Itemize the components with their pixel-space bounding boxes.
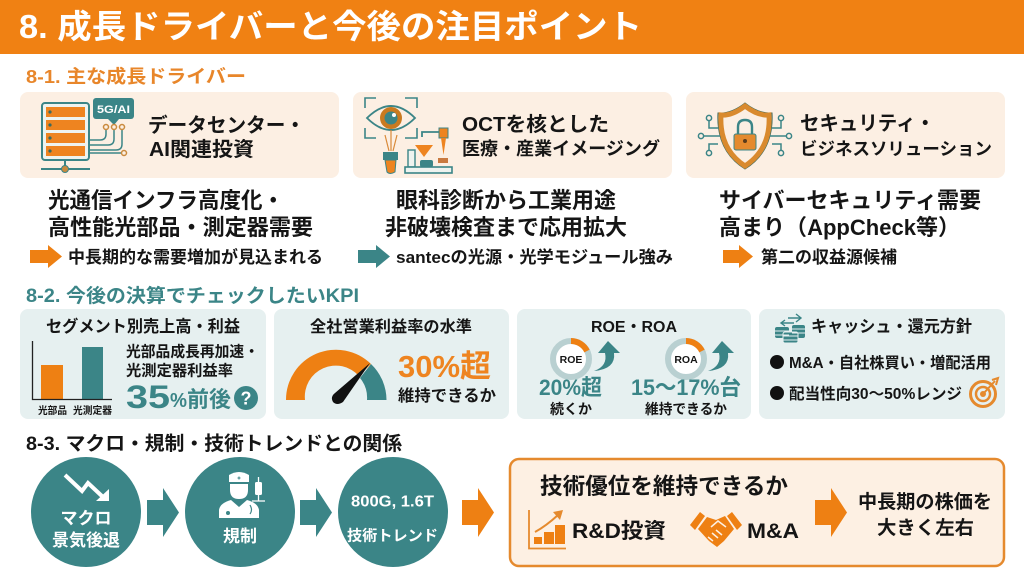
panel: operating margin KPI: 維持できるか	[398, 387, 496, 405]
arrow: orange to callout	[462, 488, 494, 537]
panel: operating margin KPI: 全社営業利益率の水準	[310, 317, 472, 336]
icon: target	[970, 378, 998, 406]
icon: shield with lock	[698, 103, 792, 169]
arrow: teal to regulation	[147, 488, 179, 537]
card title	[462, 113, 660, 159]
circle: macro: マクロ	[60, 509, 112, 528]
panel: segment KPI	[20, 309, 266, 419]
panel: operating margin KPI	[274, 309, 509, 419]
panel: technology leadership callout: 技術優位を維持できるか	[540, 474, 788, 499]
circle: technology trend: 技術トレンド	[347, 526, 438, 544]
donut: ROA	[668, 341, 704, 377]
panel: data center card	[20, 92, 339, 178]
icon: coins	[775, 314, 805, 343]
panel: segment KPI: 光部品成長再加速・	[126, 342, 259, 360]
circle: macro	[31, 457, 141, 567]
panel: segment KPI: 光測定器利益率	[126, 362, 233, 380]
text block: imaging applications: 非破壊検査まで応用拡大	[385, 215, 627, 240]
card title: セキュリティ・	[800, 113, 935, 135]
arrow: teal to technology	[300, 488, 332, 537]
icon: handshake	[690, 512, 742, 547]
arrow: orange 1	[30, 245, 62, 268]
donut: ROE	[553, 341, 589, 377]
text block: optical infrastructure	[48, 188, 313, 240]
panel: segment KPI: セグメント別売上高・利益	[46, 316, 240, 336]
icon: question	[234, 386, 258, 410]
panel: cash and returns KPI	[759, 309, 1005, 419]
card title: AI関連投資	[149, 137, 254, 161]
icon: server with 5G/AI	[41, 98, 134, 172]
bullet item: payout: 配当性向30〜50%レンジ	[789, 384, 962, 403]
text: result: 大きく左右	[877, 517, 974, 539]
donut: ROA: ROA	[674, 354, 698, 366]
panel: ROE ROA KPI: 続くか	[550, 401, 592, 417]
header banner: 8. 成長ドライバーと今後の注目ポイント	[19, 8, 642, 45]
text block: cyber security: サイバーセキュリティ需要	[719, 188, 981, 213]
header banner	[0, 0, 1024, 54]
metric: 35%: 35	[126, 379, 170, 415]
icon: falling trend	[65, 475, 109, 501]
donut: ROE: ROE	[560, 354, 582, 366]
note: revenue: 第二の収益源候補	[761, 247, 897, 267]
note: demand: 中長期的な需要増加が見込まれる	[68, 247, 323, 267]
gauge	[286, 350, 386, 404]
heading: 8-2: 8-2. 今後の決算でチェックしたいKPI	[26, 284, 359, 307]
metric: 35%	[126, 379, 231, 415]
heading: 8-3: 8-3. マクロ・規制・技術トレンドとの関係	[26, 432, 403, 455]
arrow: ROA up	[708, 341, 734, 371]
panel: technology leadership callout	[510, 459, 1004, 566]
panel: technology leadership callout: R&D投資	[572, 520, 666, 543]
arrow: teal	[358, 245, 390, 268]
panel: operating margin KPI: 30%超	[398, 349, 491, 384]
icon: doctor	[219, 472, 265, 518]
panel: security card	[686, 92, 1005, 178]
panel: OCT card	[353, 92, 672, 178]
arrow: ROE up	[594, 341, 620, 371]
card title: OCTを核とした	[462, 113, 609, 136]
panel: cash and returns KPI: キャッシュ・還元方針	[811, 316, 972, 336]
card title	[800, 113, 992, 159]
circle: macro: 景気後退	[52, 530, 120, 550]
bar chart	[32, 341, 112, 417]
metric: 35%: 前後	[187, 387, 231, 412]
card title: ビジネスソリューション	[800, 139, 992, 159]
arrow: orange 2	[723, 245, 753, 268]
panel: ROE ROA KPI: 15〜17%台	[631, 375, 741, 400]
text: result	[858, 491, 992, 539]
text block: imaging applications: 眼科診断から工業用途	[396, 188, 616, 213]
circle: technology trend	[338, 457, 448, 567]
text block: cyber security: 高まり（AppCheck等）	[719, 215, 960, 240]
panel: ROE ROA KPI: 維持できるか	[645, 401, 727, 417]
heading: 8-1: 8-1. 主な成長ドライバー	[26, 66, 246, 87]
arrow: orange result	[815, 488, 847, 537]
icon: growth chart	[529, 510, 566, 548]
icon: eye and imaging equipment	[365, 98, 452, 174]
circle: regulation	[185, 457, 295, 567]
bar chart: 光部品	[38, 404, 67, 417]
text: result: 中長期の株価を	[858, 491, 992, 513]
bar chart: 光測定器	[73, 404, 112, 417]
panel: technology leadership callout: M&A	[747, 520, 799, 543]
card title: 医療・産業イメージング	[462, 138, 660, 159]
bullet item: M&A: M&A・自社株買い・増配活用	[789, 353, 991, 372]
panel: ROE ROA KPI	[517, 309, 751, 419]
icon: question: ?	[240, 388, 252, 408]
panel: ROE ROA KPI: ROE・ROA	[591, 319, 677, 336]
metric: 35%: %	[170, 390, 187, 412]
card title	[148, 113, 305, 161]
text block: optical infrastructure: 光通信インフラ高度化・	[48, 188, 284, 213]
icon: server with 5G/AI: 5G/AI	[97, 104, 130, 116]
circle: technology trend: 800G, 1.6T	[351, 494, 435, 510]
text block: optical infrastructure: 高性能光部品・測定器需要	[48, 215, 313, 240]
text block: cyber security	[719, 188, 981, 240]
circle: regulation: 規制	[223, 527, 257, 546]
note: santec: santecの光源・光学モジュール強み	[396, 247, 673, 267]
card title: データセンター・	[148, 113, 305, 137]
panel: ROE ROA KPI: 20%超	[539, 375, 602, 400]
text block: imaging applications	[385, 188, 627, 240]
